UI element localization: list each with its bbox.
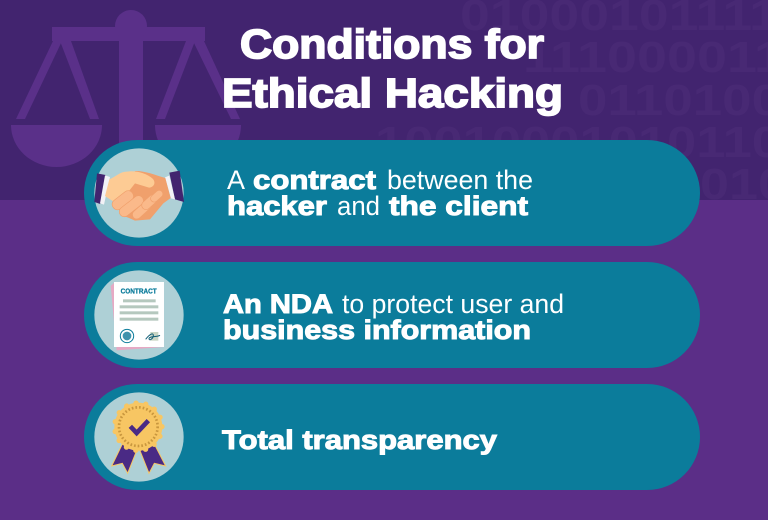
text: contract [227,165,533,221]
title: Ethical Hacking [222,70,563,116]
text: contract: the client [389,191,528,221]
background binary digits: 111000011 [523,33,768,82]
icon: contract document [94,270,184,360]
title [222,21,563,116]
icon: handshake [94,148,184,238]
panel: NDA [84,262,700,368]
text: NDA: business information [223,315,531,345]
panel: contract between hacker and client [84,140,700,246]
icon: award rosette [94,392,184,482]
title: Conditions for [240,21,544,67]
text: NDA [223,289,564,345]
icon: scales of justice [11,10,241,167]
text: NDA: An NDA [223,289,333,319]
text: contract: and [337,191,380,221]
text: contract: A [227,165,245,195]
text: transparency: Total transparency [222,425,497,455]
icon: contract document: CONTRACT [121,289,157,296]
background binary digits [375,0,768,209]
text: contract: hacker [227,191,327,221]
text: NDA: to protect user and [342,289,564,319]
text: contract: contract [253,165,376,195]
background binary digits: 10010001010110 [375,118,768,167]
text: contract: between the [387,165,533,195]
background binary digits: 0110100 [578,76,768,125]
panel: total transparency [84,384,700,490]
